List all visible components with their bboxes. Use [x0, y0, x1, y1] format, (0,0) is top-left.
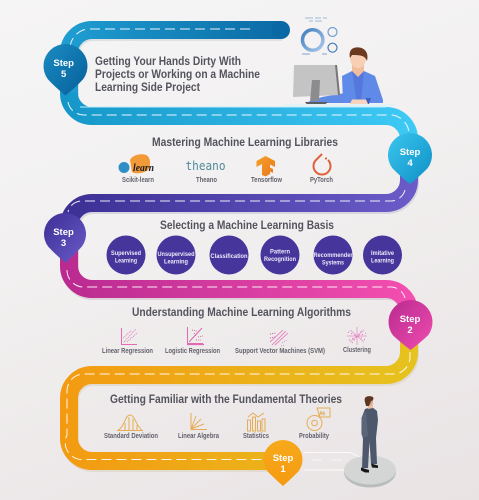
- heading: step 1: Getting Familiar with the Fundamental Theories: [110, 392, 342, 406]
- basis: supervised learning: [106, 236, 146, 274]
- library: scikit-learn: learn: [133, 163, 154, 174]
- step 5 pin: 5: [61, 69, 67, 80]
- step 2 pin: [389, 300, 432, 350]
- theory: probability: Probability: [299, 433, 329, 440]
- basis: unsupervised learning: Unsupervised: [158, 251, 195, 258]
- basis: supervised learning: Learning: [115, 258, 137, 264]
- algorithm: clustering: Clustering: [343, 347, 371, 354]
- heading: step 3: Selecting a Machine Learning Basis: [160, 218, 334, 232]
- road: step 5 to step 4 band: [68, 93, 409, 165]
- basis: unsupervised learning: Learning: [164, 258, 188, 266]
- road: step 3 to step 2 band: [67, 245, 410, 332]
- heading: step 5: Getting Your Hands Dirty With: [95, 54, 241, 68]
- heading: step 4: Mastering Machine Learning Libraries: [152, 135, 338, 149]
- heading: step 5: [95, 54, 260, 94]
- step 4 pin: [388, 133, 432, 184]
- algorithm: linear regression: [102, 328, 153, 355]
- heading: step 5: Projects or Working on a Machine: [95, 67, 260, 81]
- heading: step 5: Learning Side Project: [95, 80, 200, 94]
- step 4 pin: 4: [407, 158, 413, 169]
- step 2 pin: 2: [407, 325, 413, 336]
- basis: classification: Classification: [210, 253, 248, 260]
- library: pytorch: PyTorch: [310, 177, 333, 184]
- step 3 pin: [44, 213, 86, 263]
- theory: probability: %: [320, 412, 326, 418]
- basis: recommender systems: [314, 236, 353, 274]
- step 5 pin: Step: [53, 58, 74, 69]
- theory: statistics: Statistics: [243, 433, 269, 440]
- theory: statistics: [243, 413, 269, 440]
- road outline: path toward figure: [304, 452, 362, 470]
- step 4 pin: Step: [400, 147, 420, 158]
- step 3 pin: Step: [53, 227, 74, 238]
- basis: unsupervised learning: [156, 236, 196, 274]
- library: theano: Theano: [196, 177, 217, 184]
- step 1 pin: Step: [273, 453, 293, 464]
- algorithm: logistic regression: [165, 327, 220, 355]
- step 5 pin: [44, 44, 88, 96]
- basis: recommender systems: Systems: [322, 260, 344, 266]
- library: pytorch: [310, 154, 333, 184]
- basis: classification: [210, 236, 248, 274]
- basis: pattern recognition: Pattern: [270, 248, 290, 256]
- library: tensorflow: Tensorflow: [251, 177, 282, 184]
- illustration: person at computer: [285, 47, 395, 105]
- theory: standard deviation: [104, 415, 158, 440]
- algorithm: linear regression: Linear Regression: [102, 348, 153, 355]
- basis: imitative learning: Learning: [371, 258, 394, 264]
- step 1 pin: 1: [280, 464, 286, 475]
- basis: imitative learning: Imitative: [371, 250, 394, 257]
- basis: recommender systems: Recommender: [314, 252, 353, 259]
- step 2 pin: Step: [400, 314, 420, 325]
- theory: linear algebra: [178, 413, 219, 440]
- algorithm: clustering: [343, 327, 371, 354]
- step 3 pin: 3: [61, 238, 66, 249]
- illustration: standing businessman on disc: [344, 396, 396, 488]
- road: step 2 to step 1 band: [65, 330, 410, 463]
- basis: pattern recognition: [260, 236, 300, 274]
- road: step 5 top band: [69, 21, 290, 95]
- basis: imitative learning: [363, 236, 402, 274]
- algorithm: logistic regression: Logistic Regression: [165, 348, 220, 355]
- library: theano: theano: [186, 158, 226, 173]
- library: scikit-learn: [118, 154, 154, 184]
- road: step 4 to step 3 band: [68, 165, 410, 247]
- library: scikit-learn: Scikit-learn: [122, 177, 154, 184]
- theory: linear algebra: Linear Algebra: [178, 433, 219, 440]
- library: theano: [186, 158, 226, 184]
- algorithm: support vector machines: [235, 330, 325, 355]
- library: tensorflow: [251, 156, 282, 184]
- basis: supervised learning: Supervised: [111, 250, 141, 257]
- theory: probability: [299, 408, 330, 440]
- step 1 pin: [264, 440, 302, 486]
- basis: pattern recognition: Recognition: [264, 256, 296, 263]
- theory: standard deviation: Standard Deviation: [104, 433, 158, 440]
- algorithm: support vector machines: Support Vector Machines (SVM): [235, 348, 325, 355]
- icon: data circles: [302, 18, 337, 54]
- heading: step 2: Understanding Machine Learning Algorithms: [132, 305, 351, 319]
